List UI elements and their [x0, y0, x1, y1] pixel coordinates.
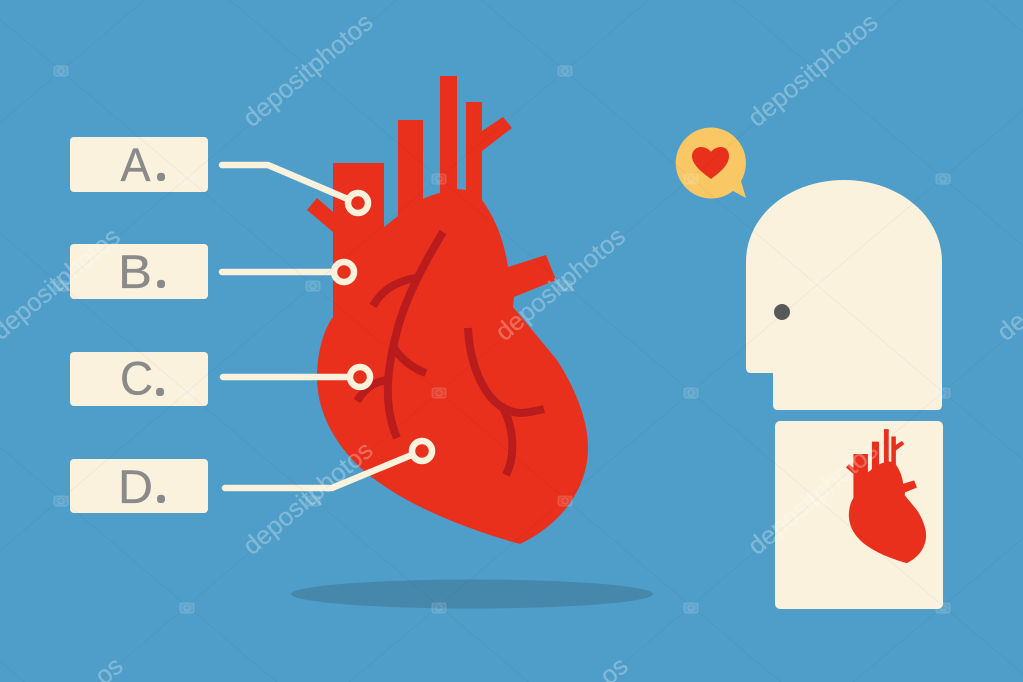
floating shadow under heart: [291, 580, 653, 608]
label box C: C: [120, 352, 153, 406]
pointer C: [223, 367, 370, 387]
label box D: [70, 459, 208, 514]
pointer B: [222, 262, 354, 282]
label box A: [70, 137, 208, 192]
icon: small heart: [692, 147, 729, 179]
heart silhouette: [307, 76, 588, 544]
label box D: .: [158, 483, 164, 505]
stock watermark: depositphotos: [743, 8, 883, 133]
pointer D: [225, 441, 432, 488]
small heart in torso: [846, 429, 926, 563]
stock watermark: depositphotos: [238, 436, 378, 561]
coronary vessels: [357, 232, 544, 475]
pointer A: [222, 165, 368, 213]
label box B: [70, 244, 208, 299]
stock watermark: depositphotos: [743, 436, 883, 561]
label box B: .: [158, 268, 164, 290]
speech bubble with heart: [676, 128, 746, 198]
person torso: [775, 421, 943, 609]
large anatomical heart: [307, 76, 588, 544]
label box C: [70, 352, 208, 406]
stock watermark: depositphotos: [490, 222, 631, 347]
label box B: B: [118, 246, 152, 299]
label box C: .: [157, 376, 163, 398]
stock watermark: depositphotos: [238, 8, 378, 133]
person head: [746, 180, 942, 410]
label box D: D: [118, 461, 153, 514]
label box A: .: [158, 161, 164, 183]
eye: [774, 304, 790, 320]
label box A: A: [120, 139, 151, 192]
